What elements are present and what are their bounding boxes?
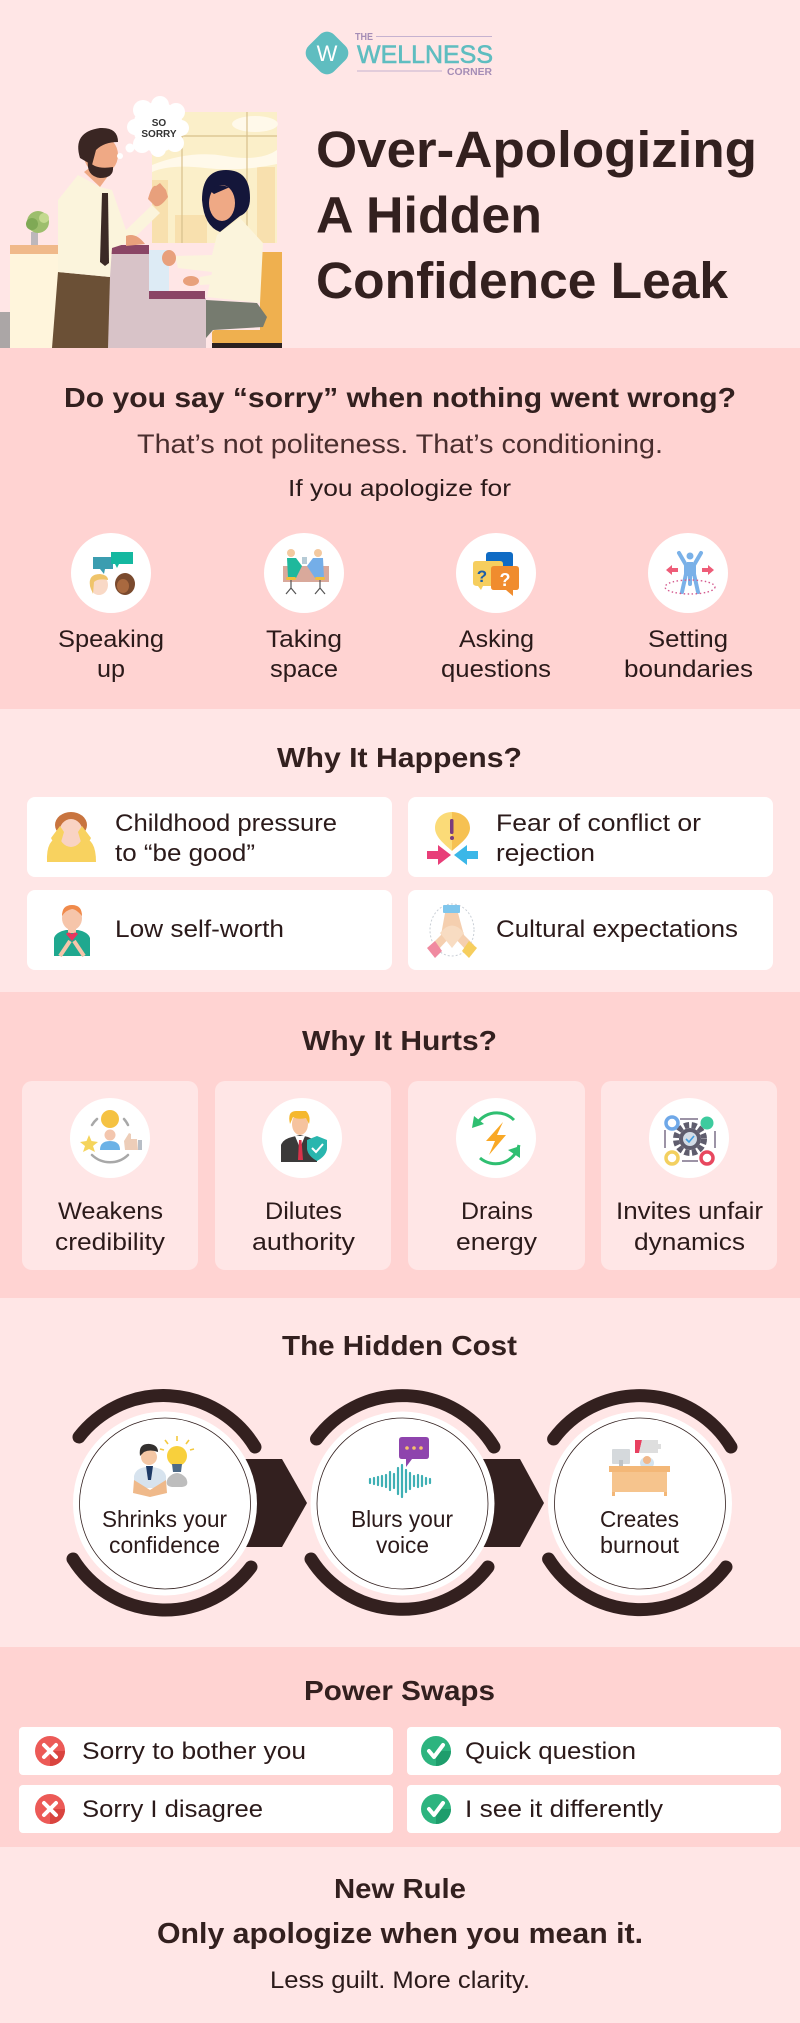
card: weakens credibility: Weakens bbox=[58, 1198, 163, 1225]
card: childhood pressure bbox=[27, 797, 392, 877]
swap: sorry to bother you: Sorry to bother you bbox=[82, 1738, 306, 1765]
card: cultural expectations bbox=[408, 890, 773, 970]
panel: if you apologize for bbox=[0, 348, 800, 709]
card: dilutes authority: authority bbox=[252, 1229, 355, 1256]
item: setting boundaries: Setting bbox=[648, 626, 728, 653]
arrow: step 1 to 2 bbox=[236, 1459, 307, 1547]
title: A Hidden bbox=[316, 186, 542, 244]
item: speaking up bbox=[58, 533, 164, 683]
closing line: Less guilt. More clarity. bbox=[270, 1967, 530, 1994]
lead-in text: If you apologize for bbox=[288, 475, 511, 501]
speech bubble text: SO bbox=[152, 118, 166, 129]
card: cultural expectations: Cultural expectations bbox=[496, 916, 738, 943]
step: blurs your voice: Blurs your bbox=[351, 1506, 453, 1532]
statement: only apologize: Only apologize when you mean it. bbox=[157, 1918, 643, 1950]
panel: why it happens bbox=[0, 709, 800, 992]
item: setting boundaries: boundaries bbox=[624, 656, 753, 683]
item: asking questions: ? bbox=[500, 570, 510, 590]
card: drains energy bbox=[408, 1081, 585, 1270]
logo: The Wellness Corner bbox=[302, 28, 493, 78]
title: Confidence Leak bbox=[316, 252, 729, 309]
heading: why it happens: Why It Happens? bbox=[277, 742, 522, 773]
title bbox=[316, 121, 757, 309]
card: low self-worth: Low self-worth bbox=[115, 916, 284, 943]
swap: sorry I disagree: Sorry I disagree bbox=[82, 1796, 263, 1823]
item: speaking up: Speaking bbox=[58, 626, 164, 653]
step: creates burnout bbox=[548, 1396, 732, 1610]
swap: sorry to bother you bbox=[19, 1727, 393, 1775]
subheading: That’s not politeness. That’s conditioning. bbox=[137, 429, 663, 459]
card: invites unfair dynamics: Invites unfair bbox=[616, 1198, 763, 1225]
speech bubble text: SORRY bbox=[141, 129, 177, 140]
step: shrinks your confidence: Shrinks your bbox=[102, 1506, 227, 1532]
step: shrinks your confidence: confidence bbox=[109, 1532, 220, 1558]
card: low self-worth bbox=[27, 890, 392, 970]
item: asking questions bbox=[441, 533, 551, 683]
logo: The Wellness Corner: CORNER bbox=[447, 66, 492, 78]
panel: new rule bbox=[0, 1847, 800, 2023]
item: taking space bbox=[264, 533, 344, 683]
swap: quick question: Quick question bbox=[465, 1738, 636, 1765]
logo: The Wellness Corner: WELLNESS bbox=[357, 41, 493, 69]
step: blurs your voice: voice bbox=[376, 1532, 429, 1558]
card: drains energy: Drains bbox=[461, 1198, 533, 1225]
item: asking questions: questions bbox=[441, 656, 551, 683]
card: fear of conflict bbox=[408, 797, 773, 877]
card: weakens credibility bbox=[22, 1081, 198, 1270]
swap: sorry I disagree bbox=[19, 1785, 393, 1833]
step: creates burnout: Creates bbox=[600, 1506, 679, 1532]
speech bubble text bbox=[141, 118, 177, 140]
arrow: step 2 to 3 bbox=[474, 1459, 544, 1547]
panel: power swaps bbox=[0, 1647, 800, 1847]
item: asking questions: Asking bbox=[459, 626, 534, 653]
step: blurs your voice bbox=[310, 1396, 494, 1609]
item: setting boundaries bbox=[624, 533, 753, 683]
heading: the hidden cost: The Hidden Cost bbox=[282, 1330, 517, 1361]
panel: header bbox=[0, 0, 800, 348]
item: speaking up: up bbox=[97, 656, 125, 683]
card: dilutes authority: Dilutes bbox=[265, 1198, 342, 1225]
card: invites unfair dynamics: dynamics bbox=[634, 1229, 745, 1256]
item: taking space: Taking bbox=[266, 626, 342, 653]
card: dilutes authority bbox=[215, 1081, 391, 1270]
step: shrinks your confidence bbox=[73, 1396, 257, 1610]
card: childhood pressure: Childhood pressure bbox=[115, 810, 337, 837]
card: invites unfair dynamics bbox=[601, 1081, 777, 1270]
card: fear of conflict: rejection bbox=[496, 840, 595, 867]
heading: new rule: New Rule bbox=[334, 1873, 466, 1904]
title: Over-Apologizing bbox=[316, 121, 757, 178]
item: asking questions: ? bbox=[477, 567, 487, 586]
swap: I see it differently bbox=[407, 1785, 781, 1833]
logo: The Wellness Corner: THE bbox=[355, 32, 373, 43]
heading: why it hurts: Why It Hurts? bbox=[302, 1025, 497, 1056]
logo: The Wellness Corner: W bbox=[317, 41, 338, 66]
card: childhood pressure: to “be good” bbox=[115, 840, 255, 867]
heading: power swaps: Power Swaps bbox=[304, 1675, 495, 1706]
swap: I see it differently: I see it differently bbox=[465, 1796, 663, 1823]
panel: why it hurts bbox=[0, 992, 800, 1298]
swap: quick question bbox=[407, 1727, 781, 1775]
card: drains energy: energy bbox=[456, 1229, 537, 1256]
illustration: man apologizing to colleague at desk bbox=[0, 96, 282, 348]
panel: the hidden cost bbox=[0, 1298, 800, 1647]
item: taking space: space bbox=[270, 656, 338, 683]
step: creates burnout: burnout bbox=[600, 1532, 680, 1558]
card: weakens credibility: credibility bbox=[55, 1229, 165, 1256]
heading: question: Do you say “sorry” when nothing went wrong? bbox=[64, 382, 736, 413]
card: fear of conflict: Fear of conflict or bbox=[496, 810, 701, 837]
